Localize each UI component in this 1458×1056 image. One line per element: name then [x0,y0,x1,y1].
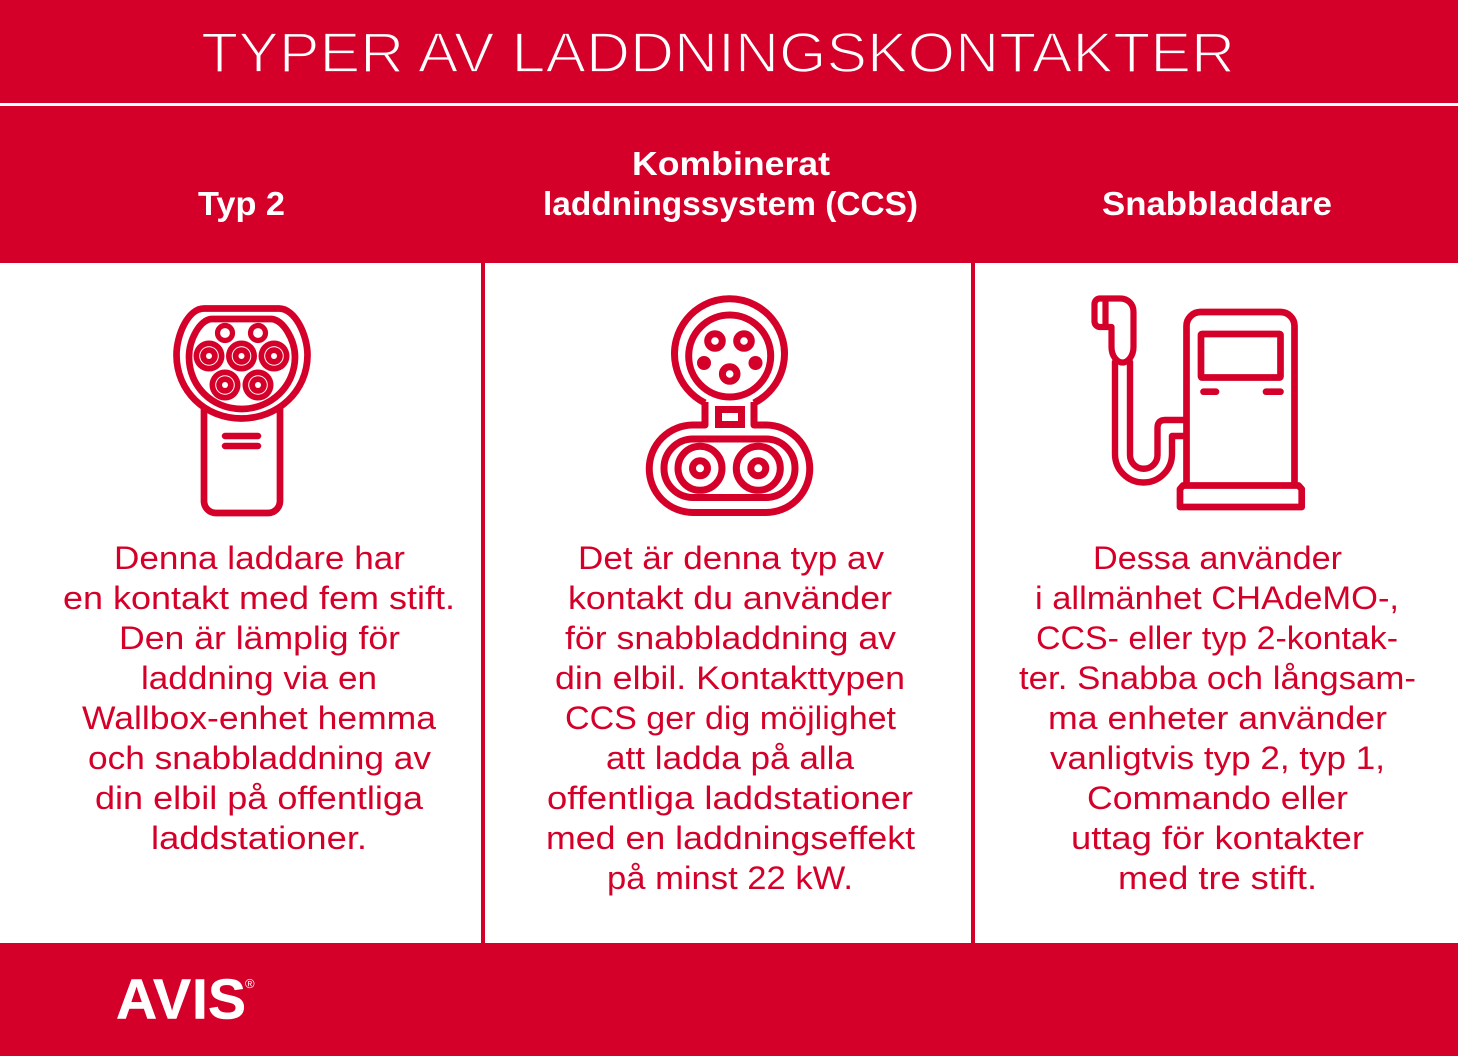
logo: AVIS: ® [245,976,255,991]
heading: Typ 2: Typ 2 [198,186,285,223]
text block: Typ 2 description: laddning via en [141,660,377,696]
heading: Kombinerat laddningssystem (CCS): Kombinerat [632,146,830,183]
text block: CCS description: kontakt du använder [568,580,892,616]
logo: AVIS: AVIS [116,968,246,1032]
text block: Snabbladdare description: Dessa använder [1093,540,1342,576]
icon: CCS connector [649,299,810,512]
text block: Typ 2 description: Denna laddare har [114,540,405,576]
text block: Typ 2 description: Wallbox-enhet hemma [82,700,436,736]
text block: Snabbladdare description [1019,540,1416,896]
panel: CCS [543,146,918,896]
text block: Typ 2 description: Den är lämplig för [119,620,400,656]
icon: charging station [1094,298,1302,507]
panel: Snabbladdare [1019,186,1416,896]
text block: Snabbladdare description: ter. Snabba och långsam- [1019,660,1416,696]
text block: CCS description [546,540,915,896]
text block: Snabbladdare description: med tre stift. [1118,860,1317,896]
title: TYPER AV LADDNINGSKONTAKTER [201,21,1235,85]
text block: Typ 2 description: och snabbladdning av [88,740,431,776]
panel: Typ 2 [63,186,455,856]
text block: CCS description: med en laddningseffekt [546,820,915,856]
text block: CCS description: för snabbladdning av [565,620,896,656]
text block: CCS description: CCS ger dig möjlighet [565,700,896,736]
footer band [0,943,1458,1056]
text block: Typ 2 description: laddstationer. [151,820,367,856]
heading: Snabbladdare: Snabbladdare [1102,186,1332,223]
heading: Kombinerat laddningssystem (CCS): laddningssystem (CCS) [543,186,918,223]
text block: Snabbladdare description: vanligtvis typ 2, typ 1, [1050,740,1385,776]
text block: Snabbladdare description: i allmänhet CHAdeMO-, [1035,580,1399,616]
text block: Typ 2 description [63,540,455,856]
icon: Type 2 connector [176,308,308,513]
text block: Snabbladdare description: uttag för kontakter [1071,820,1364,856]
text block: Typ 2 description: en kontakt med fem stift. [63,580,455,616]
text block: Typ 2 description: din elbil på offentliga [95,780,423,816]
text block: CCS description: på minst 22 kW. [607,860,853,896]
text block: CCS description: offentliga laddstationer [547,780,913,816]
text block: CCS description: att ladda på alla [606,740,854,776]
header band [0,0,1458,263]
text block: Snabbladdare description: ma enheter använder [1048,700,1387,736]
text block: CCS description: din elbil. Kontakttypen [555,660,905,696]
text block: CCS description: Det är denna typ av [578,540,884,576]
heading: Kombinerat laddningssystem (CCS) [543,146,918,223]
text block: Snabbladdare description: Commando eller [1087,780,1348,816]
text block: Snabbladdare description: CCS- eller typ 2-kontak- [1036,620,1398,656]
